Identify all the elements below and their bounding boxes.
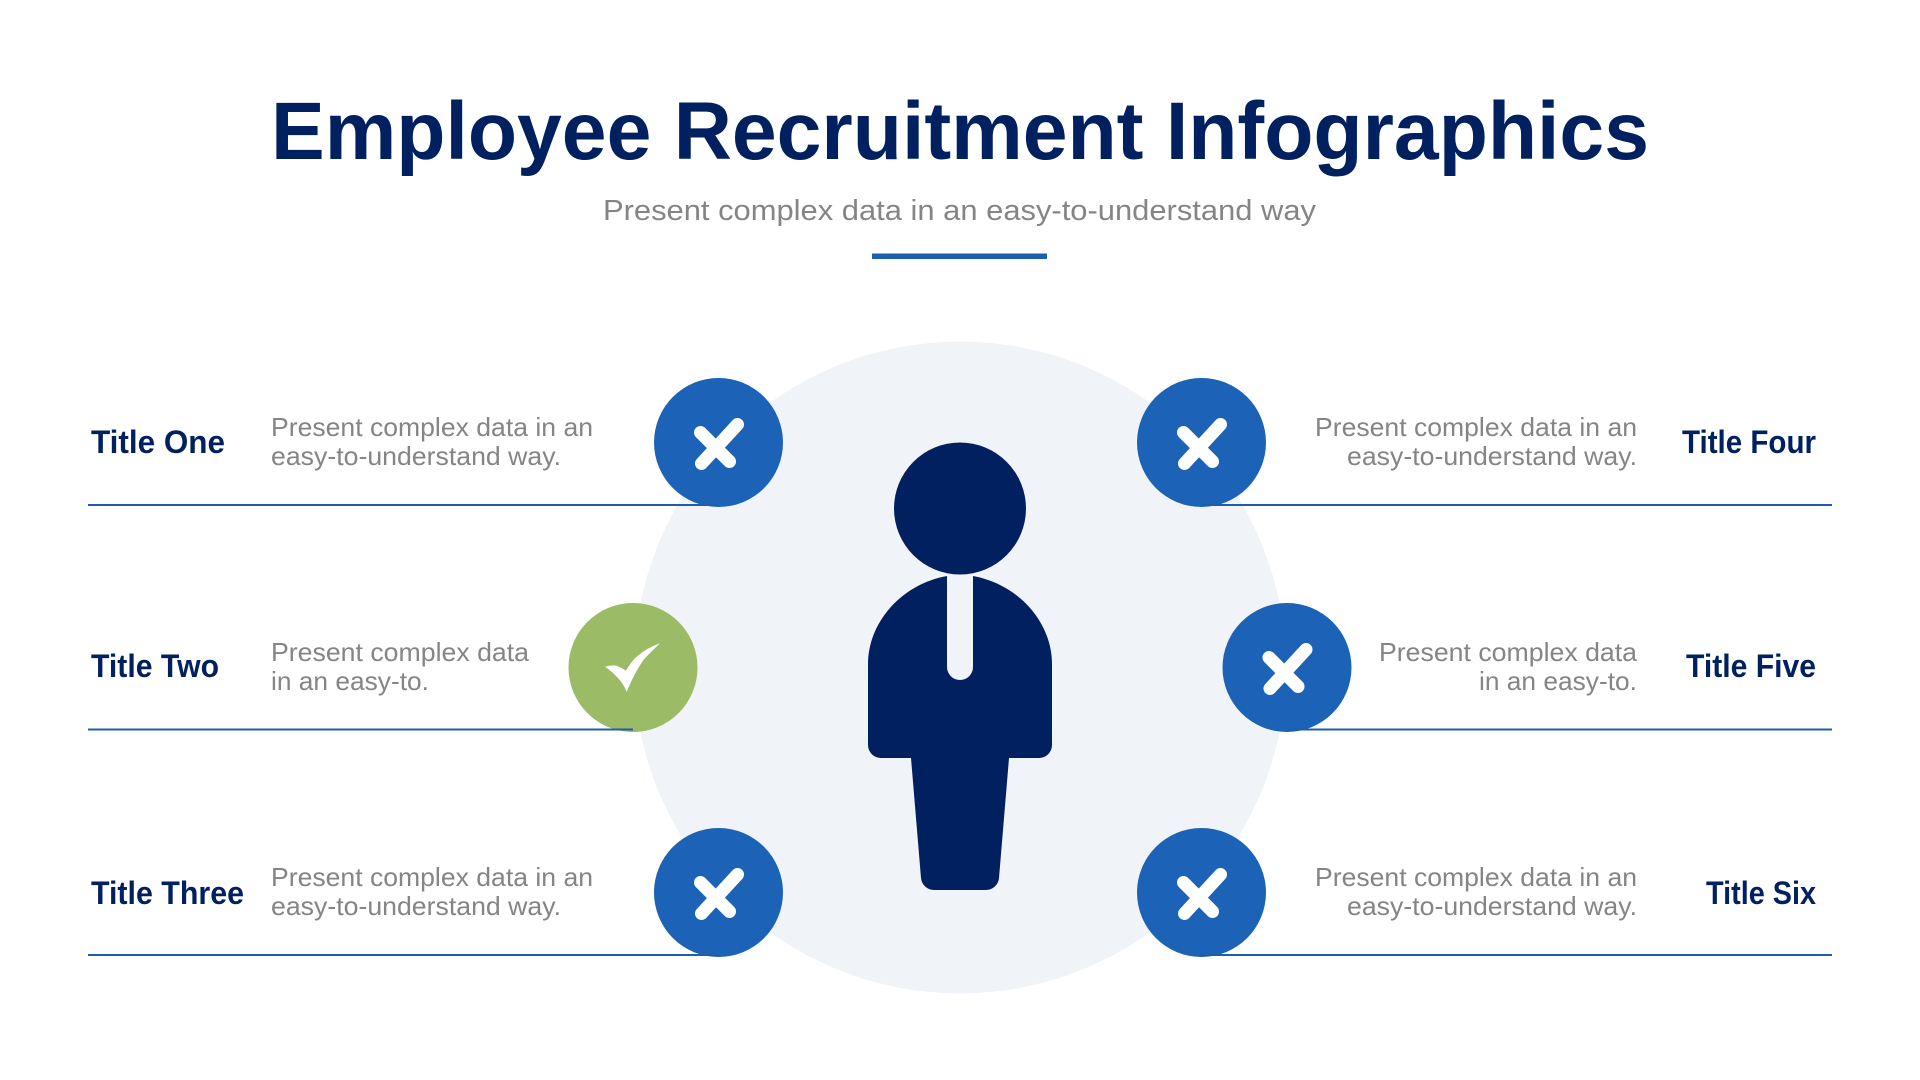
subtitle: Present complex data in an easy-to-understand way (603, 195, 1317, 227)
item: Title Four: easy-to-understand way. (1347, 441, 1637, 471)
item: Title Three: Present complex data in an (271, 862, 593, 892)
item: Title Six: easy-to-understand way. (1347, 891, 1637, 921)
item: Title Five: Title Five (1686, 648, 1816, 684)
item: Title One: Title One (91, 424, 225, 460)
item: Title Six: Present complex data in an (1315, 862, 1637, 892)
item: Title Three: easy-to-understand way. (271, 891, 561, 921)
item: Title Two: in an easy-to. (271, 666, 429, 696)
central person icon (868, 442, 1052, 890)
item: Title One: easy-to-understand way. (271, 441, 561, 471)
item: Title Four (1137, 378, 1832, 507)
item: Title Five: in an easy-to. (1479, 666, 1637, 696)
item: Title Six: Title Six (1706, 875, 1816, 911)
item: Title Five (1222, 603, 1832, 732)
item: Title Two: Present complex data (271, 637, 530, 667)
title accent bar (872, 254, 1047, 259)
item: Title Three (88, 828, 783, 957)
item: Title Two: Title Two (91, 648, 219, 684)
item: Title Four: Present complex data in an (1315, 412, 1637, 442)
title: Employee Recruitment Infographics (271, 86, 1649, 177)
item: Title One: Present complex data in an (271, 412, 593, 442)
item: Title Two (88, 603, 698, 732)
item: Title Three: Title Three (91, 875, 244, 911)
item: Title One (88, 378, 783, 507)
item: Title Four: Title Four (1682, 424, 1816, 460)
item: Title Six (1137, 828, 1832, 957)
background circle (634, 342, 1286, 994)
item: Title Five: Present complex data (1379, 637, 1638, 667)
